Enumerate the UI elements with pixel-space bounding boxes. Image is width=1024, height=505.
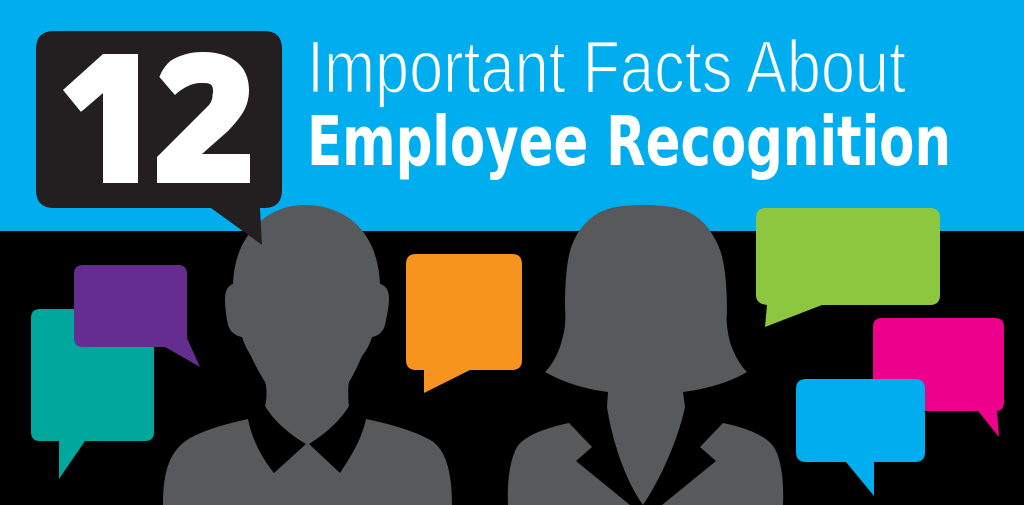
silhouette: man: [163, 205, 452, 505]
woman's left shoulder: [508, 423, 630, 505]
speech bubble: blue: [796, 379, 925, 496]
speech bubble: 12: [36, 22, 282, 245]
man's head and neck: [225, 205, 389, 444]
number 12: 1: [62, 24, 158, 216]
speech bubble: orange: [406, 254, 522, 393]
speech bubble: magenta: [873, 318, 1004, 437]
black lower band: [0, 231, 1024, 505]
silhouette: woman: [508, 205, 783, 505]
speech bubble: purple: [74, 265, 200, 367]
speech bubble: teal: [31, 309, 154, 479]
number 12: 2: [156, 22, 253, 217]
number 12: [63, 52, 250, 183]
blue header band: [0, 0, 1024, 231]
speech bubble: green: [756, 208, 940, 327]
woman's hair and neck: [545, 205, 747, 505]
woman's right shoulder: [662, 423, 783, 505]
man's shoulders: [163, 419, 452, 505]
title line 1: Important Facts About: [307, 26, 906, 108]
